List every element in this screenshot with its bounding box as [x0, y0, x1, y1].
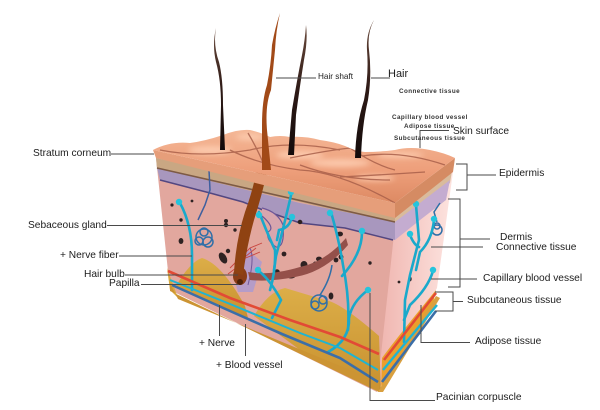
label: Blood vessel [216, 324, 283, 371]
epidermis: tan band left [156, 158, 395, 224]
nerve fibers near follicle [228, 243, 262, 274]
label: Papilla: Papilla [109, 278, 140, 289]
small label: Connective tissue: Connective tissue [399, 88, 460, 95]
label: Capillary blood vessel: Capillary blood vessel [483, 273, 582, 284]
blood vessels: right face [382, 293, 437, 382]
arrector muscle [248, 238, 348, 281]
small label: Adipose tissue: Adipose tissue [404, 123, 455, 130]
hair follicle [233, 248, 262, 292]
label: Epidermis [456, 164, 544, 190]
label: Hair: Hair [388, 68, 409, 80]
label: Sebaceous gland: Sebaceous gland [28, 220, 107, 231]
label: Pacinian corpuscle: Pacinian corpuscle [436, 392, 522, 403]
surface highlights [188, 134, 424, 181]
hair 3 [288, 25, 307, 155]
panel: right face dermis [377, 172, 453, 392]
label: Blood vessel: + Blood vessel [216, 360, 283, 371]
subcutaneous fat: left face [167, 258, 381, 392]
label: Nerve [199, 305, 235, 349]
hair 2 shaft [262, 13, 280, 170]
blood vessels: left face [168, 271, 379, 382]
label: Papilla [109, 278, 238, 289]
label: Adipose tissue [421, 305, 542, 347]
label: Subcutaneous tissue [435, 292, 562, 311]
label: Nerve fiber: + Nerve fiber [60, 250, 119, 261]
sweat gland: centre [311, 265, 332, 311]
hair 1 [214, 28, 225, 150]
sweat gland: right [432, 203, 442, 235]
subcutaneous fat: right face [381, 290, 436, 391]
hair 4 [355, 20, 374, 158]
skin surface top [153, 130, 455, 203]
label: Pacinian corpuscle [370, 293, 522, 403]
label: Stratum corneum: Stratum corneum [33, 148, 111, 159]
label: Nerve fiber [60, 250, 192, 261]
label: Dermis: Dermis [500, 232, 532, 243]
small label: Subcutaneous tissue: Subcutaneous tissue [394, 135, 465, 142]
label: Subcutaneous tissue: Subcutaneous tissue [467, 295, 562, 306]
capillaries: right face [404, 201, 437, 342]
stratum corneum slab side [395, 158, 455, 218]
panel: left face dermis [156, 158, 395, 392]
epidermis: right face [395, 165, 453, 240]
surface creases [160, 133, 445, 203]
label: Hair shaft [276, 72, 354, 81]
label: Skin surface: Skin surface [453, 126, 509, 137]
label: Hair shaft: Hair shaft [318, 72, 354, 81]
skin block [153, 130, 455, 392]
label: Epidermis: Epidermis [499, 168, 544, 179]
label: Nerve: + Nerve [199, 338, 235, 349]
epidermis: purple band left [157, 168, 395, 240]
label: Stratum corneum [33, 148, 154, 159]
hair shaft in skin [234, 150, 270, 275]
label: Hair [371, 68, 409, 80]
small label: Capillary blood vessel: Capillary blood vessel [392, 114, 468, 121]
label: Adipose tissue: Adipose tissue [475, 336, 542, 347]
label: Connective tissue: Connective tissue [496, 242, 577, 253]
dark cell dots [170, 200, 412, 300]
sebaceous loop [262, 208, 283, 247]
label: Dermis [448, 199, 532, 287]
capillaries: left face [176, 189, 371, 352]
label: Skin surface [420, 126, 509, 148]
sweat duct and gland: left [195, 170, 213, 247]
label: Hair bulb: Hair bulb [84, 269, 125, 280]
